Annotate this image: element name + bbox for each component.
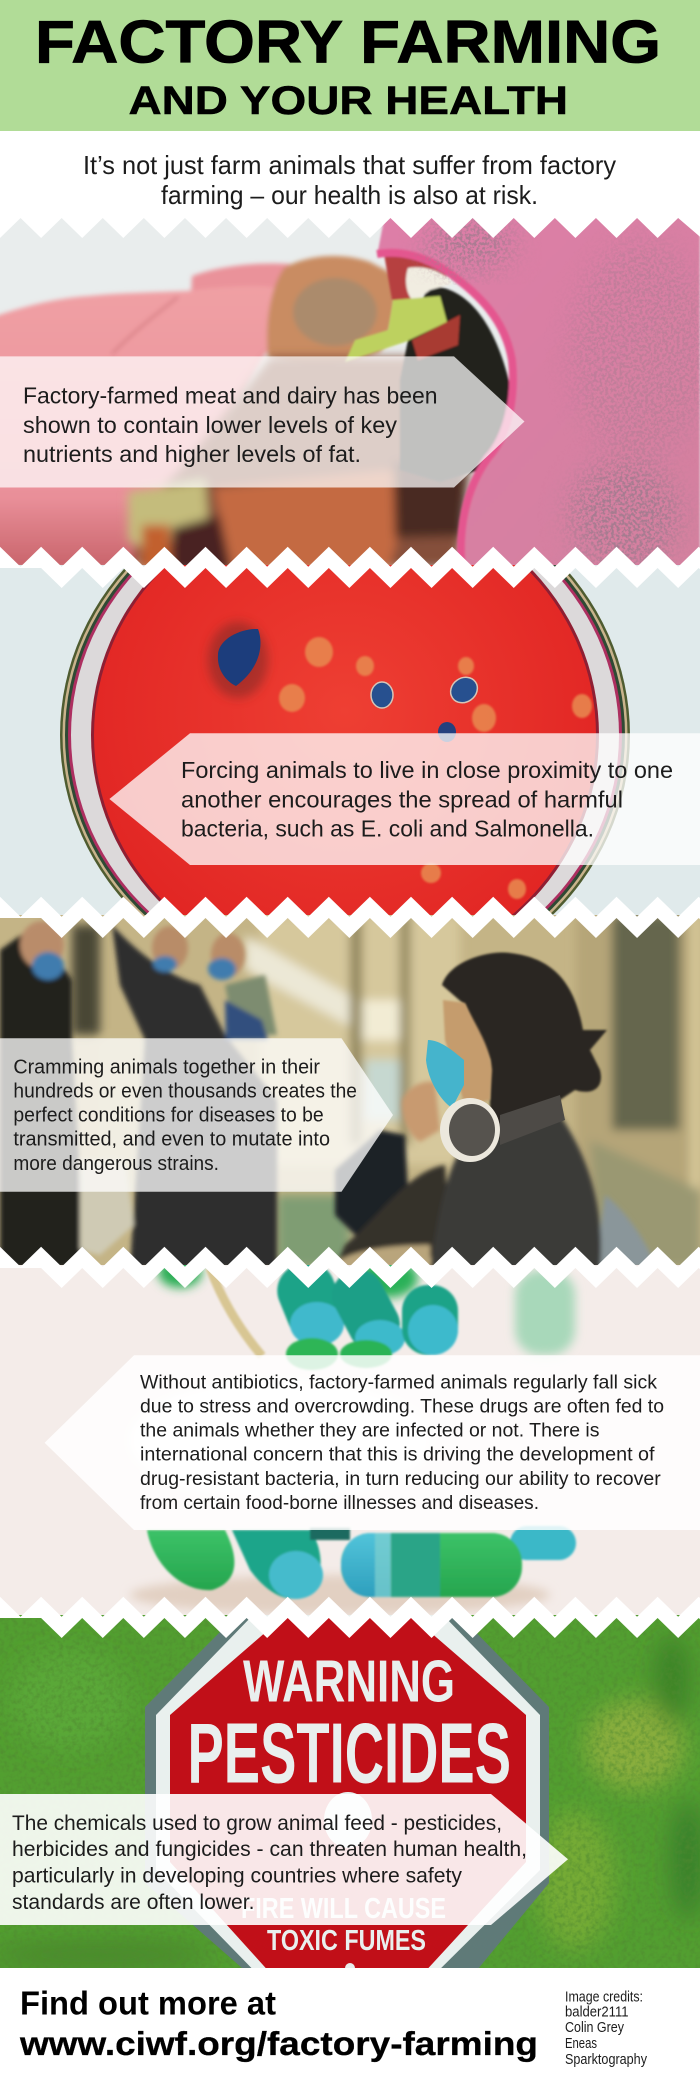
callout: disease: perfect conditions for diseases to be	[13, 1105, 324, 1127]
woman's head with mask and headphones	[426, 952, 607, 1162]
callout: nutrients: nutrients and higher levels of fat.	[23, 441, 361, 467]
photo: man eating burger	[0, 214, 700, 572]
footer call to action	[19, 1984, 538, 2062]
callout: antibiotics: the animals whether they are infected or not. There is	[140, 1420, 600, 1442]
callout: pesticides: standards are often lower.	[12, 1891, 254, 1914]
callout: disease	[0, 1038, 393, 1192]
photo: commuters in masks	[0, 915, 700, 1270]
warning sign: PESTICIDES	[188, 1707, 511, 1802]
panel: disease subway crowd	[0, 915, 700, 1270]
decorative zigzag top	[0, 210, 700, 238]
callout: bacteria: bacteria, such as E. coli and Salmonella.	[181, 816, 594, 842]
image credits: Image credits:	[565, 1990, 643, 2006]
header banner	[0, 0, 700, 131]
callout: antibiotics	[45, 1355, 700, 1530]
callout: antibiotics: due to stress and overcrowding. These drugs are often fed to	[140, 1395, 664, 1417]
callout: pesticides: herbicides and fungicides - can threaten human health,	[12, 1838, 527, 1861]
panel: pesticides warning sign	[0, 1612, 700, 1985]
warning sign	[145, 1612, 549, 1985]
photo: petri dish	[0, 565, 700, 915]
title: FACTORY FARMING	[35, 8, 661, 76]
intro text: farming – our health is also at risk.	[161, 180, 538, 210]
callout: antibiotics: international concern that this is driving the development of	[140, 1444, 655, 1466]
callout: pesticides	[0, 1794, 568, 1925]
callout: disease: transmitted, and even to mutate into	[13, 1129, 330, 1151]
intro text: It’s not just farm animals that suffer from factory	[83, 150, 616, 180]
photo: moss background	[0, 1612, 700, 1985]
warning sign: FIRE WILL CAUSE	[241, 1893, 446, 1925]
image credits: balder2111	[565, 2005, 629, 2021]
image credits: Eneas	[565, 2036, 597, 2052]
image credits: Sparktography	[565, 2052, 648, 2068]
callout: antibiotics: Without antibiotics, factory-farmed animals regularly fall sick	[140, 1371, 657, 1393]
decorative zigzag band	[0, 547, 700, 588]
decorative zigzag band	[0, 897, 700, 938]
panel: nutrients burger photo	[0, 214, 700, 572]
callout: disease: hundreds or even thousands creates the	[13, 1080, 357, 1102]
callout: nutrients: Factory-farmed meat and dairy has been	[23, 383, 438, 409]
callout: bacteria	[109, 733, 700, 865]
callout: bacteria: another encourages the spread of harmful	[181, 787, 623, 813]
decorative zigzag band	[0, 1247, 700, 1288]
callout: disease: more dangerous strains.	[13, 1153, 219, 1175]
callout: disease: Cramming animals together in their	[13, 1056, 320, 1078]
image credits	[565, 1990, 648, 2068]
bacteria colonies	[208, 622, 592, 899]
warning sign: TOXIC FUMES	[267, 1925, 426, 1957]
callout: nutrients	[0, 356, 524, 488]
subtitle heading: AND YOUR HEALTH	[128, 79, 568, 123]
panel: bacteria petri dish	[0, 565, 700, 915]
callout: antibiotics: from certain food-borne illnesses and diseases.	[140, 1492, 539, 1514]
footer call to action: Find out more at	[20, 1984, 276, 2021]
image credits: Colin Grey	[565, 2020, 625, 2036]
intro text	[83, 150, 616, 210]
photo: green and blue capsules	[0, 1254, 700, 1618]
warning sign: WARNING	[243, 1649, 455, 1715]
callout: pesticides: The chemicals used to grow animal feed - pesticides,	[12, 1812, 502, 1835]
callout: nutrients: shown to contain lower levels of key	[23, 412, 397, 438]
decorative zigzag band	[0, 1597, 700, 1638]
callout: antibiotics: drug-resistant bacteria, in turn reducing our ability to recover	[140, 1468, 661, 1490]
callout: bacteria: Forcing animals to live in close proximity to one	[181, 757, 673, 783]
panel: antibiotics capsules	[0, 1254, 700, 1618]
callout: pesticides: particularly in developing countries where safety	[12, 1865, 462, 1888]
footer call to action: www.ciwf.org/factory-farming	[19, 2025, 538, 2062]
